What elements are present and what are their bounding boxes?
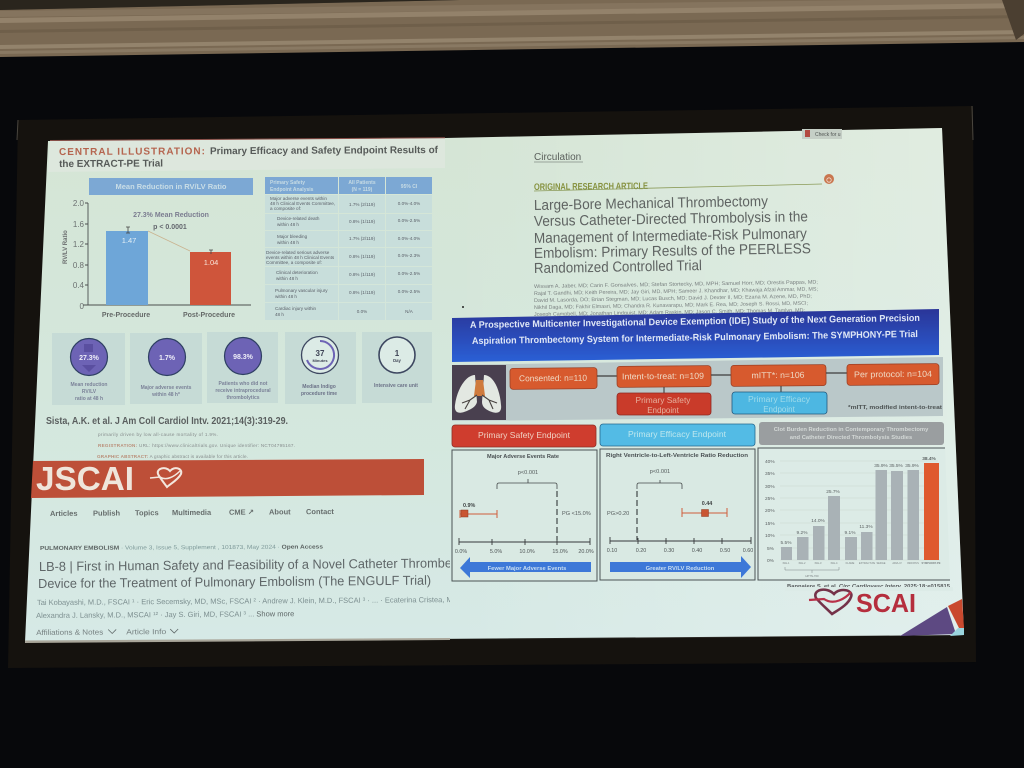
stat tile: no intraprocedural thrombolytics xyxy=(207,332,278,403)
navigation: Multimedia xyxy=(172,508,212,517)
bar chart: mean reduction in RV/LV ratio: Pre-Procedure xyxy=(102,312,150,319)
abstract fragment: primarily driven by low all-cause mortality of 1.9%. xyxy=(98,432,218,437)
table: primary safety endpoint analysis: 0.0%-4.0% xyxy=(398,236,420,241)
chart: clot burden reduction bars: 14.0% xyxy=(811,518,826,524)
table: primary safety endpoint analysis: 1.7% (2/119) xyxy=(349,202,375,207)
navigation xyxy=(50,507,334,518)
projection screen frame xyxy=(8,106,976,668)
table: primary safety endpoint analysis: 0.0%-2.5% xyxy=(398,271,420,276)
abstract fragment: REGISTRATION: URL: https://www.clinicaltrials.gov. Unique identifier: NCT04795167. xyxy=(98,443,295,448)
panel: EXTRACT-PE central illustration xyxy=(46,145,439,427)
chart: clot burden reduction bars: 20% xyxy=(765,508,775,514)
bar chart: mean reduction in RV/LV ratio: 0.4 xyxy=(73,281,85,290)
table: primary safety endpoint analysis: events within 48 h Clinical Events xyxy=(266,255,335,260)
article title: Device for the Treatment of Pulmonary Embolism (The ENGULF Trial) xyxy=(38,573,431,591)
chart: RV/LV ratio reduction: 0.44 xyxy=(702,501,712,507)
ceiling molding xyxy=(0,0,1024,57)
chart: RV/LV ratio reduction: 0.50 xyxy=(720,548,730,554)
flow step: consented xyxy=(510,368,597,389)
table: primary safety endpoint analysis: Endpoint Analysis xyxy=(270,187,314,193)
chart: clot burden reduction bars: 35.9% xyxy=(905,463,920,469)
bar chart: mean reduction in RV/LV ratio: 1.2 xyxy=(73,240,85,249)
table: primary safety endpoint analysis: 95% CI xyxy=(401,184,418,190)
chart: clot burden reduction bars: 5.5% xyxy=(781,540,792,546)
table: primary safety endpoint analysis: All Patients xyxy=(348,180,376,186)
article metadata: PULMONARY EMBOLISM · Volume 3, Issue 5, Supplement , 101873, May 2024 · Open Access xyxy=(40,545,323,552)
heading: primary efficacy endpoint xyxy=(600,424,755,446)
chart: clot burden reduction bars: 25% xyxy=(765,496,775,502)
table: primary safety endpoint analysis: 48 h Clinical Events Committee, xyxy=(270,201,335,206)
panel: SYMPHONY-PE trial xyxy=(452,309,953,591)
banner: trial title: Aspiration Thrombectomy System for Intermediate-Risk Pulmonary Embolism: The SYMPHONY-PE Trial xyxy=(472,329,918,347)
stat tile: mean reduction: RV/LV xyxy=(82,389,97,395)
chart: major adverse events rate xyxy=(452,450,597,581)
chart: clot burden reduction bars: FLAME xyxy=(846,561,855,565)
table: primary safety endpoint analysis: Cardiac injury within xyxy=(275,306,317,311)
flow step: per protocol: Per protocol: n=104 xyxy=(854,369,932,379)
icon: lungs xyxy=(452,365,506,420)
stat tile: intensive care unit: 1 xyxy=(395,349,400,358)
stat tile: no intraprocedural thrombolytics: Patients who did not xyxy=(219,381,268,387)
article authors: Joseph Campbell, MD; Jonathan Lindquist, MD; Adam Raskin, MD; Jason C. Smith, MD; Thomas M. Tamlyn, MD; xyxy=(534,308,805,318)
table: primary safety endpoint analysis: within 48 h xyxy=(277,240,299,245)
bar chart: mean reduction in RV/LV ratio: 1.47 xyxy=(122,236,136,245)
chart: major adverse events rate: PG <15.0% xyxy=(562,511,591,517)
stat tile: major adverse events: Major adverse events xyxy=(141,385,192,391)
flow box: primary efficacy endpoint: Endpoint xyxy=(763,405,796,414)
article authors: Tai Kobayashi, M.D., FSCAI ¹ · Eric Secemsky, MD, MSc, FSCAI ² · Andrew J. Klein, M.D., FSCAI ³ · ... · Ecaterina Cristea, MD ¹¹ · xyxy=(37,595,470,607)
stat tile: median procedure time: 37 xyxy=(316,349,325,358)
stat tile: major adverse events: within 48 h* xyxy=(151,392,180,398)
connector: intent-to-treat to safety endpoint xyxy=(663,387,665,393)
stat tile: major adverse events xyxy=(130,333,202,404)
slide background xyxy=(25,128,964,643)
chart: RV/LV ratio reduction xyxy=(600,449,755,580)
arrow: consented to intent-to-treat xyxy=(597,375,617,377)
article title xyxy=(38,555,486,591)
bar chart: mean reduction in RV/LV ratio: 27.3% Mean Reduction xyxy=(133,212,209,219)
chart: clot burden reduction bars: 35.5% xyxy=(889,463,904,469)
navigation: CME ↗ xyxy=(229,508,254,517)
banner: JSCAI xyxy=(31,459,424,498)
check for updates badge: Check for u xyxy=(815,132,841,138)
stat tile: no intraprocedural thrombolytics: thrombolytics xyxy=(226,395,260,401)
citation: Bannaiere et al: Bannaiere S, et al. Circ Cardiovasc Interv. 2025;18:e015815 xyxy=(787,584,951,590)
chart: clot burden reduction bars: 35% xyxy=(765,471,775,477)
flow box: primary safety endpoint: Endpoint xyxy=(647,406,680,415)
article authors: Article Info xyxy=(126,627,166,636)
table: primary safety endpoint analysis: within 48 h xyxy=(277,222,299,227)
table: primary safety endpoint analysis: Device-related death xyxy=(277,216,320,221)
chart: clot burden reduction bars: ARIA-IV xyxy=(892,561,902,565)
bar chart: mean reduction in RV/LV ratio: 0 xyxy=(80,302,85,311)
table: primary safety endpoint analysis: 0.0% xyxy=(357,309,367,314)
stat tile: intensive care unit: Intensive care unit xyxy=(374,383,418,389)
bar chart: mean reduction in RV/LV ratio: Mean Reduction in RV/LV Ratio xyxy=(116,182,227,191)
stat tile: intensive care unit: Day xyxy=(393,358,402,363)
table: primary safety endpoint analysis: 0.0%-2.5% xyxy=(398,289,420,294)
table: primary safety endpoint analysis: 0.8% (1/119) xyxy=(349,254,375,259)
flow band background xyxy=(452,357,943,421)
stat tile: mean reduction: ratio at 48 h xyxy=(75,396,103,402)
chart: clot burden reduction bars: 30% xyxy=(765,484,775,490)
heading: primary safety endpoint xyxy=(452,425,596,447)
chart: clot burden reduction bars: INH-2 xyxy=(799,561,806,565)
bar chart: mean reduction in RV/LV ratio: 2.0 xyxy=(73,199,85,208)
heading: central illustration: the EXTRACT-PE Trial xyxy=(59,158,163,170)
table: primary safety endpoint analysis: Major adverse events within xyxy=(270,196,327,201)
chart: major adverse events rate: 20.0% xyxy=(578,549,594,555)
projected slide xyxy=(25,128,964,643)
bar chart: mean reduction in RV/LV ratio: 1.04 xyxy=(204,258,218,267)
navigation: Topics xyxy=(135,508,159,517)
arrow: mITT to per protocol xyxy=(826,372,847,374)
table: primary safety endpoint analysis: (N = 119) xyxy=(352,187,373,193)
table: primary safety endpoint analysis: 0.8% (1/119) xyxy=(349,290,375,295)
chart: clot burden reduction bars: INH-4 xyxy=(831,561,838,565)
chart: clot burden reduction bars: 15% xyxy=(765,521,775,527)
stat tile: no intraprocedural thrombolytics: receive intraprocedural xyxy=(215,388,271,394)
stat tile: mean reduction: 27.3% xyxy=(79,355,100,362)
heading: clot burden reduction: Clot Burden Reduction in Contemporary Thrombectomy xyxy=(774,427,929,433)
section label xyxy=(534,174,834,193)
article authors: Alexandra J. Lansky, M.D., MSCAI ¹² · Jay S. Giri, MD, FSCAI ³ ... Show more xyxy=(36,609,294,620)
table: primary safety endpoint analysis: 0.0%-4.0% xyxy=(398,201,420,206)
bar chart: mean reduction in RV/LV ratio: 0.8 xyxy=(73,261,85,270)
citation: Sista et al: Sista, A.K. et al. J Am Coll Cardiol Intv. 2021;14(3):319-29. xyxy=(46,416,288,427)
chart: clot burden reduction bars: HPTN-700 xyxy=(805,574,819,578)
table: primary safety endpoint analysis: Pulmonary vascular injury xyxy=(275,288,328,293)
table: primary safety endpoint analysis: 0.8% (1/119) xyxy=(349,219,375,224)
article authors: Wissam A. Jaber, MD; Carin F. Gonsalves, MD; Stefan Stortecky, MD, MPH; Samuel Horr, MD; Orestis Pappas, MD; xyxy=(534,280,818,290)
banner: trial title xyxy=(452,309,939,362)
table: primary safety endpoint analysis: 1.7% (2/119) xyxy=(349,236,375,241)
flow box: primary safety endpoint xyxy=(617,393,711,415)
stat tile: median procedure time: Median Indigo xyxy=(302,384,336,390)
chart: major adverse events rate: Fewer Major Adverse Events xyxy=(488,566,566,572)
heading: clot burden reduction xyxy=(759,422,944,445)
table: primary safety endpoint analysis: 0.0%-2.3% xyxy=(398,253,420,258)
article authors xyxy=(36,595,470,637)
article authors xyxy=(534,280,818,318)
logo: SCAI xyxy=(809,588,916,618)
connector: mITT to efficacy endpoint xyxy=(780,386,782,392)
flow box: primary efficacy endpoint xyxy=(732,392,827,414)
flow step: intent-to-treat xyxy=(617,366,711,387)
table: primary safety endpoint analysis: Device-related serious adverse xyxy=(266,250,330,255)
chart: RV/LV ratio reduction: Right Ventricle-to-Left-Ventricle Ratio Reduction xyxy=(606,453,749,459)
arrow: intent-to-treat to mITT xyxy=(711,374,731,376)
chart: clot burden reduction bars: INH-1 xyxy=(783,561,790,565)
bar chart: mean reduction in RV/LV ratio: RV/LV Ratio xyxy=(63,230,69,264)
stat tile: intensive care unit xyxy=(362,332,432,403)
bar chart: mean reduction in RV/LV ratio xyxy=(63,178,253,319)
chart: clot burden reduction bars: 35.9% xyxy=(874,463,889,469)
article authors: Nikhil Daga, MD; Fakhir Elmasri, MD; Chandra R. Kunavarapu, MD; Mark E. Rea, MD; Joseph S. Rossi, MD, MSCI; xyxy=(534,301,808,311)
chart: clot burden reduction bars: SEDGE xyxy=(876,561,886,565)
chart: major adverse events rate: 0.0% xyxy=(455,549,467,555)
table: primary safety endpoint analysis: Primary Safety xyxy=(270,180,305,186)
article title: Versus Catheter-Directed Thrombolysis in the xyxy=(534,209,808,230)
banner: trial title: A Prospective Multicenter Investigational Device Exemption (IDE) Study of the Next Generation Precision xyxy=(470,313,920,331)
article authors: Affiliations & Notes xyxy=(36,628,103,637)
table: primary safety endpoint analysis: a composite of: xyxy=(270,206,301,211)
panel: PEERLESS article xyxy=(534,129,842,318)
abstract fragment xyxy=(97,432,295,459)
table: primary safety endpoint analysis: Clinical deterioration xyxy=(276,270,318,275)
bar chart: mean reduction in RV/LV ratio: 1.6 xyxy=(73,220,85,229)
stat tile: mean reduction: Mean reduction xyxy=(71,382,107,388)
navigation: About xyxy=(269,507,291,516)
heading: primary efficacy endpoint: Primary Efficacy Endpoint xyxy=(628,429,727,439)
chart: RV/LV ratio reduction: 0.30 xyxy=(664,548,674,554)
chart: clot burden reduction bars: 0% xyxy=(767,558,775,564)
chart: major adverse events rate: 0.9% xyxy=(463,503,475,509)
chart: clot burden reduction bars: 10% xyxy=(765,533,775,539)
navigation: Publish xyxy=(93,509,121,518)
chart: clot burden reduction bars xyxy=(758,448,950,580)
table: primary safety endpoint analysis: within 48 h xyxy=(276,276,298,281)
article title: Embolism: Primary Results of the PEERLESS xyxy=(534,241,811,262)
chart: clot burden reduction bars: 9.2% xyxy=(797,530,808,536)
section label: ORIGINAL RESEARCH ARTICLE xyxy=(534,181,648,193)
article title xyxy=(534,194,811,277)
chart: major adverse events rate: Major Adverse Events Rate xyxy=(487,454,559,460)
table: primary safety endpoint analysis: 48 h xyxy=(275,312,284,317)
logo: SCAI: SCAI xyxy=(856,588,916,618)
chart: clot burden reduction bars: EXTRACT-PE xyxy=(859,561,875,565)
footnote: mITT: *mITT, modified intent-to-treat xyxy=(848,405,942,411)
chart: RV/LV ratio reduction: 0.10 xyxy=(607,548,617,554)
table: primary safety endpoint analysis: Committee, a composite of: xyxy=(266,260,322,265)
article title: Large-Bore Mechanical Thrombectomy xyxy=(534,194,769,214)
table: primary safety endpoint analysis xyxy=(265,177,432,320)
chart: clot burden reduction bars: 5% xyxy=(767,546,775,552)
chart: RV/LV ratio reduction: Greater RV/LV Reduction xyxy=(646,566,715,572)
navigation: Articles xyxy=(50,509,78,518)
check for updates badge xyxy=(802,129,842,139)
bar chart: mean reduction in RV/LV ratio: p < 0.0001 xyxy=(153,224,187,231)
article title: Management of Intermediate-Risk Pulmonary xyxy=(534,226,808,247)
flow box: primary safety endpoint: Primary Safety xyxy=(636,396,690,405)
heading: central illustration xyxy=(59,145,439,170)
table: primary safety endpoint analysis: within 48 h xyxy=(275,294,297,299)
table: primary safety endpoint analysis: Major bleeding xyxy=(277,234,308,239)
flow step: consented: Consented: n=110 xyxy=(519,373,587,383)
stat tile: median procedure time: Minutes xyxy=(312,358,328,363)
chart: major adverse events rate: 15.0% xyxy=(552,549,568,555)
table: primary safety endpoint analysis: 0.0%-2.5% xyxy=(398,218,420,223)
article title: Randomized Controlled Trial xyxy=(534,258,702,277)
abstract fragment: GRAPHIC ABSTRACT: A graphic abstract is available for this article. xyxy=(97,454,248,459)
panel: JSCAI ENGULF trial article xyxy=(31,459,487,637)
chart: clot burden reduction bars: 38.4% xyxy=(922,456,937,462)
chart: clot burden reduction bars: 11.3% xyxy=(859,524,873,530)
heading: primary safety endpoint: Primary Safety Endpoint xyxy=(478,430,571,440)
chart: RV/LV ratio reduction: 0.20 xyxy=(636,548,646,554)
stat tile: median procedure time xyxy=(285,332,356,404)
heading: central illustration: CENTRAL ILLUSTRATION: xyxy=(59,146,205,158)
bar chart: mean reduction in RV/LV ratio: Post-Procedure xyxy=(183,312,235,319)
flow step: intent-to-treat: Intent-to-treat: n=109 xyxy=(622,371,704,381)
chart: clot burden reduction bars: 25.7% xyxy=(826,489,841,495)
table: primary safety endpoint analysis: 0.8% (1/119) xyxy=(349,272,375,277)
flow step: mITT: mITT*: n=106 xyxy=(751,370,805,380)
chart: clot burden reduction bars: 40% xyxy=(765,459,775,465)
chart: major adverse events rate: p<0.001 xyxy=(518,470,538,476)
chart: RV/LV ratio reduction: p<0.001 xyxy=(650,469,670,475)
stat tile: no intraprocedural thrombolytics: 98.3% xyxy=(233,354,254,361)
heading: central illustration: Primary Efficacy and Safety Endpoint Results of xyxy=(210,145,439,157)
chart: clot burden reduction bars: SYMPHONY-PE xyxy=(921,561,941,565)
banner: JSCAI: JSCAI xyxy=(36,460,134,497)
table: primary safety endpoint analysis: N/A xyxy=(405,309,414,314)
stat tile: mean reduction xyxy=(52,333,125,405)
article authors: David M. Lasorda, DO; Brian Stegman, MD; Lucas Busch, MD; David J. Dexter II, MD; Ezana M. Azene, MD, PhD; xyxy=(534,294,812,304)
chart: major adverse events rate: 10.0% xyxy=(519,549,535,555)
article title: LB-8 | First in Human Safety and Feasibility of a Novel Catheter Thrombectomy xyxy=(39,555,486,574)
chart: major adverse events rate: 5.0% xyxy=(490,549,502,555)
chart: clot burden reduction bars: INDOPUS xyxy=(907,561,919,565)
flow step: per protocol xyxy=(847,364,939,385)
article authors: Rajal T. Gandhi, MD; Keith Pereira, MD; Jay Giri, MD, MPH; Sameer J. Khandhar, MD; Khawaja Afzal Ammar, MD, MS; xyxy=(534,287,818,297)
stat tile: median procedure time: procedure time xyxy=(301,391,337,397)
chart: clot burden reduction bars: 9.1% xyxy=(845,530,856,536)
decorative corner: SCAI colours xyxy=(900,599,964,636)
stat tile: major adverse events: 1.7% xyxy=(159,355,176,362)
heading: clot burden reduction: and Catheter Directed Thrombolysis Studies xyxy=(790,435,912,441)
chart: RV/LV ratio reduction: PG>0.20 xyxy=(607,511,629,517)
chart: RV/LV ratio reduction: 0.60 xyxy=(743,548,753,554)
navigation: Contact xyxy=(306,507,334,516)
flow step: mITT xyxy=(731,365,826,386)
flow box: primary efficacy endpoint: Primary Efficacy xyxy=(748,395,810,404)
chart: clot burden reduction bars: INH-3 xyxy=(815,561,822,565)
journal name: Circulation xyxy=(534,152,581,163)
chart: RV/LV ratio reduction: 0.40 xyxy=(692,548,702,554)
